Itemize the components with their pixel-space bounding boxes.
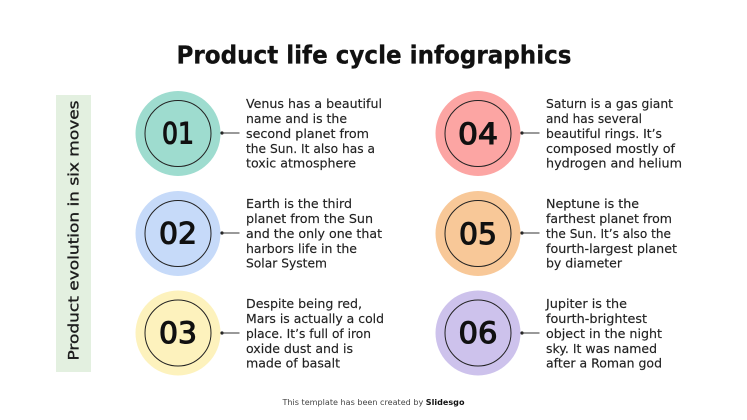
icon: number badge 02: 02 — [159, 216, 197, 250]
connector 05 — [520, 231, 540, 235]
text: Neptune: by diameter — [546, 256, 622, 270]
side label panel — [56, 95, 91, 372]
text: Saturn: composed mostly of — [546, 142, 676, 156]
text: Saturn — [546, 97, 682, 170]
connector 06 — [520, 331, 540, 335]
text: Saturn: beautiful rings. It’s — [546, 127, 662, 141]
text: Mars: Despite being red, — [246, 297, 362, 311]
side label panel: Product evolution in six moves — [66, 100, 82, 360]
text: Mars: oxide dust and is — [246, 342, 353, 356]
icon: number badge 05: 05 — [459, 217, 497, 251]
connector 03 — [220, 331, 240, 335]
text: Venus: the Sun. It also has a — [246, 142, 375, 156]
text: Venus: name and is the — [246, 112, 347, 126]
icon: number badge 02 — [136, 191, 220, 276]
step 05 — [436, 191, 677, 276]
text: Mars: made of basalt — [246, 356, 340, 370]
text: Earth — [246, 197, 382, 270]
step 04 — [436, 91, 682, 176]
text: Venus — [246, 97, 382, 170]
text: Neptune: the Sun. It’s also the — [546, 227, 671, 241]
text: Earth: Earth is the third — [246, 197, 352, 211]
icon: number badge 05 — [436, 191, 520, 276]
icon: number badge 04: 04 — [458, 117, 498, 151]
text: Venus: Venus has a beautiful — [246, 97, 382, 111]
text: Earth: planet from the Sun — [246, 212, 373, 226]
text: Jupiter: Jupiter is the — [545, 297, 627, 311]
connector 02 — [220, 231, 240, 235]
text: Earth: Solar System — [246, 256, 327, 270]
text: Jupiter — [545, 297, 662, 370]
icon: number badge 01 — [136, 91, 220, 176]
text: Earth: harbors life in the — [246, 242, 357, 256]
icon: number badge 03: 03 — [159, 316, 197, 350]
text: Neptune: farthest planet from — [546, 212, 672, 226]
text: Mars: place. It’s full of iron — [246, 327, 371, 341]
text: Saturn: hydrogen and helium — [546, 156, 682, 170]
text: Mars: Mars is actually a cold — [246, 312, 384, 326]
icon: number badge 03 — [136, 290, 220, 376]
footer credit: This template has been created by Slidesgo — [281, 398, 465, 407]
text: Earth: and the only one that — [246, 227, 382, 241]
text: Venus: second planet from — [246, 127, 369, 141]
text: Jupiter: object in the night — [546, 327, 662, 341]
text: Saturn: and has several — [546, 112, 642, 126]
text: Venus: toxic atmosphere — [246, 156, 356, 170]
icon: number badge 01: 01 — [162, 116, 194, 150]
icon: number badge 04 — [436, 91, 520, 176]
text: Saturn: Saturn is a gas giant — [546, 97, 673, 111]
text: Jupiter: fourth-brightest — [546, 312, 647, 326]
step 06 — [436, 290, 662, 376]
text: Jupiter: after a Roman god — [546, 356, 662, 370]
text: Mars — [246, 297, 384, 370]
icon: number badge 06: 06 — [458, 316, 498, 350]
connector 01 — [220, 131, 240, 135]
step 03 — [136, 290, 384, 376]
text: Jupiter: sky. It was named — [546, 342, 657, 356]
text: Neptune: Neptune is the — [546, 197, 639, 211]
text: Neptune — [546, 197, 677, 270]
step 01 — [136, 91, 382, 176]
icon: number badge 06 — [436, 290, 520, 376]
title: Product life cycle infographics — [176, 40, 572, 70]
step 02 — [136, 191, 382, 276]
text: Neptune: fourth-largest planet — [546, 242, 677, 256]
connector 04 — [520, 131, 540, 135]
